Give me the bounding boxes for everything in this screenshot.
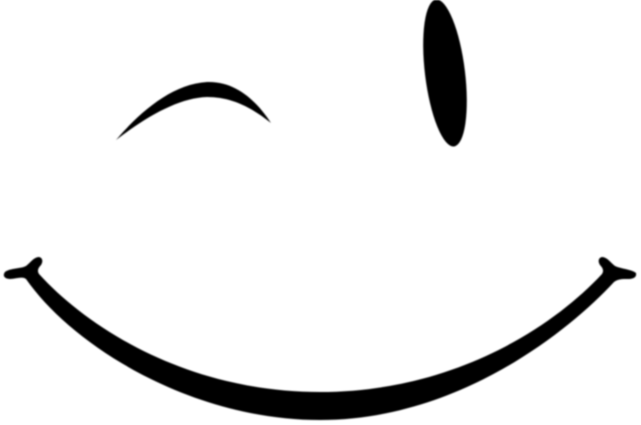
icon: winking eye bbox=[116, 82, 271, 140]
icon: smile bbox=[4, 257, 636, 420]
icon: open eye bbox=[416, 0, 474, 149]
